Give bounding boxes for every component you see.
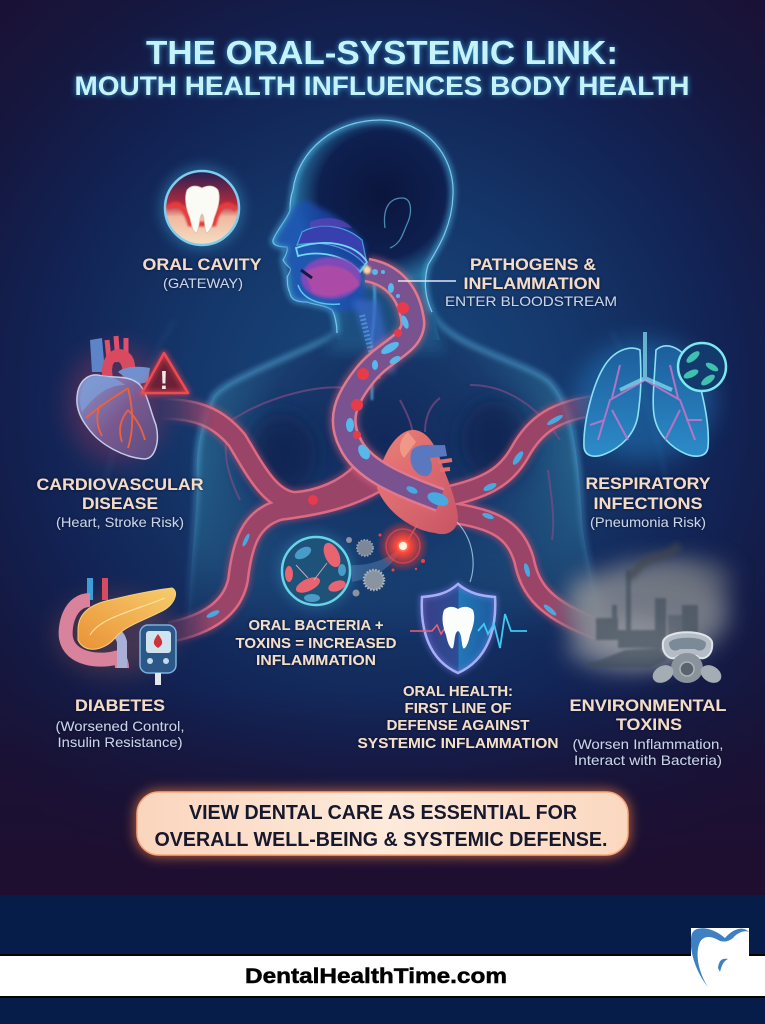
icon: warning triangle (142, 353, 188, 395)
label: pathogens and inflammation: PATHOGENS & (470, 255, 596, 274)
icon: logo tooth (691, 928, 749, 987)
callout: dental care message (135, 790, 630, 857)
title: MOUTH HEALTH INFLUENCES BODY HEALTH (74, 71, 690, 101)
icon: lungs with bacteria bubble (575, 332, 726, 460)
label: respiratory infections: (Pneumonia Risk) (590, 514, 706, 530)
icon: bacteria magnified circle (278, 533, 354, 609)
label: oral cavity (142, 255, 262, 291)
label: respiratory infections (586, 474, 711, 530)
label: oral bacteria plus toxins: INFLAMMATION (256, 652, 376, 669)
ear (384, 198, 410, 248)
icon: warning triangle: ! (160, 365, 168, 395)
label: environmental toxins: ENVIRONMENTAL (570, 696, 726, 715)
icon: glucose meter (140, 625, 176, 685)
pathogens callout line (398, 280, 456, 282)
footer band (0, 895, 765, 1024)
label: oral health first line of defense: FIRST LINE OF (404, 700, 512, 717)
label: diabetes (56, 696, 184, 750)
label: pathogens and inflammation: INFLAMMATION (464, 274, 600, 293)
label: environmental toxins: (Worsen Inflammation, (572, 736, 724, 752)
neck-to-chest vessel carrying bacteria (206, 266, 564, 619)
label: pathogens and inflammation (445, 255, 617, 309)
label: oral health first line of defense: ORAL HEALTH: (403, 683, 513, 700)
icon: shield with tooth (410, 584, 527, 673)
label: oral bacteria plus toxins: ORAL BACTERIA + (248, 617, 384, 634)
icon: polluted factory smog (565, 546, 732, 671)
icon: heart with warning (67, 336, 167, 463)
label: cardiovascular disease (36, 475, 204, 530)
label: cardiovascular disease: CARDIOVASCULAR (36, 475, 204, 494)
label: oral health first line of defense (358, 683, 558, 752)
label: environmental toxins (570, 696, 726, 768)
label: oral bacteria plus toxins: TOXINS = INCREASED (236, 635, 397, 652)
icon: tooth in oral cavity (160, 166, 244, 250)
heart (central) (377, 430, 458, 534)
label: oral health first line of defense: DEFENSE AGAINST (386, 717, 530, 734)
label: pathogens and inflammation: ENTER BLOODSTREAM (445, 293, 617, 309)
label: cardiovascular disease: (Heart, Stroke Risk) (56, 514, 184, 530)
label: cardiovascular disease: DISEASE (82, 494, 158, 513)
head and neck (273, 120, 453, 352)
title: THE ORAL-SYSTEMIC LINK: (146, 34, 618, 71)
label: environmental toxins: Interact with Bacteria) (574, 752, 722, 768)
label: oral cavity: (GATEWAY) (163, 275, 243, 291)
nasal cavity and mouth (296, 218, 395, 400)
footer stripe with site name: DentalHealthTime.com (245, 965, 507, 988)
connector: heart to shield (457, 522, 473, 582)
footer stripe with site name (0, 954, 765, 998)
label: oral health first line of defense: SYSTEMIC INFLAMMATION (358, 735, 558, 752)
label: diabetes: DIABETES (75, 696, 165, 715)
label: oral cavity: ORAL CAVITY (142, 255, 262, 274)
label: respiratory infections: INFECTIONS (594, 494, 702, 513)
title (74, 34, 690, 101)
label: diabetes: Insulin Resistance) (58, 734, 182, 750)
human body silhouette (160, 120, 605, 640)
callout: dental care message: VIEW DENTAL CARE AS ESSENTIAL FOR (189, 802, 578, 824)
blood vessels (160, 405, 600, 632)
label: diabetes: (Worsened Control, (56, 718, 184, 734)
icon: pancreas (55, 578, 176, 675)
icon: gas mask (649, 632, 725, 686)
label: environmental toxins: TOXINS (616, 715, 682, 734)
label: respiratory infections: RESPIRATORY (586, 474, 711, 493)
icon: viruses and inflammation burst (346, 520, 429, 596)
label: oral bacteria plus toxins (236, 617, 397, 669)
callout: dental care message: OVERALL WELL-BEING & SYSTEMIC DEFENSE. (154, 829, 608, 851)
thin chest vessels (226, 385, 560, 540)
